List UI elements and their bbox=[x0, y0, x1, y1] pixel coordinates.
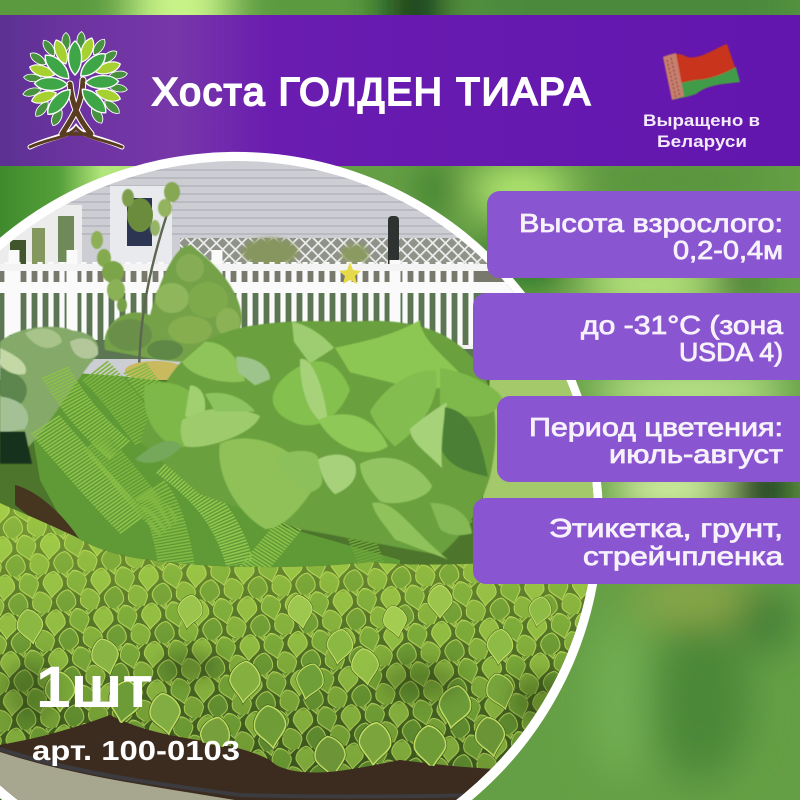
icon: tree logo bbox=[22, 31, 128, 147]
header band bbox=[0, 15, 800, 166]
round shrub behind fence bbox=[104, 245, 242, 362]
distant lawn bbox=[483, 380, 594, 498]
left window bbox=[0, 205, 82, 264]
outer dark leaves bbox=[22, 31, 128, 128]
ground tan patch bbox=[125, 361, 180, 380]
trunk and roots bbox=[30, 80, 122, 147]
shrubs behind lattice bbox=[242, 238, 369, 266]
card: height: 0,2-0,4м bbox=[673, 235, 783, 265]
brown soil bbox=[15, 485, 80, 540]
big hosta bbox=[135, 320, 502, 560]
fern bed base bbox=[34, 374, 400, 567]
card: frost hardiness bbox=[473, 293, 800, 380]
dark shadow patches in the hedge bbox=[4, 649, 570, 726]
card: frost hardiness: до -31°C (зона bbox=[581, 310, 784, 340]
icon: Belarus flag bbox=[663, 44, 740, 100]
card: height: Высота взрослого: bbox=[519, 208, 783, 238]
soil and hose at the bed edge bbox=[0, 722, 490, 800]
card: package contents: стрейчпленка bbox=[583, 541, 784, 571]
text: article number: арт. 100-0103 bbox=[32, 735, 240, 766]
title: Хоста ГОЛДЕН ТИАРА bbox=[152, 71, 590, 114]
text: quantity: 1шт bbox=[36, 655, 153, 720]
card: flowering period: Период цветения: bbox=[529, 412, 783, 442]
lattice screen bbox=[180, 238, 520, 280]
mid ground greens bbox=[0, 380, 600, 590]
card: flowering period bbox=[497, 396, 800, 482]
text: grown in Belarus bbox=[643, 111, 760, 151]
ferns bbox=[45, 368, 465, 581]
text: grown in Belarus: Выращено в bbox=[643, 111, 760, 130]
card: package contents bbox=[473, 498, 800, 584]
yellow star bbox=[339, 262, 361, 284]
fence bbox=[0, 250, 520, 359]
foreground hedge of hostas bbox=[0, 503, 620, 800]
center window bbox=[110, 186, 172, 264]
card: flowering period: июль-август bbox=[609, 439, 783, 469]
left hosta bbox=[0, 327, 98, 464]
light leaves bbox=[28, 36, 122, 106]
photo: hosta garden bbox=[0, 140, 620, 800]
card: frost hardiness: USDA 4) bbox=[679, 337, 783, 367]
house siding bbox=[0, 161, 506, 380]
sapling bbox=[91, 182, 180, 378]
photo: white ring bbox=[0, 152, 603, 800]
text: grown in Belarus: Беларуси bbox=[657, 132, 747, 151]
black post bbox=[388, 216, 399, 264]
inner green leaves bbox=[34, 41, 119, 119]
card: package contents: Этикетка, грунт, bbox=[549, 513, 783, 543]
card: height bbox=[487, 191, 800, 278]
